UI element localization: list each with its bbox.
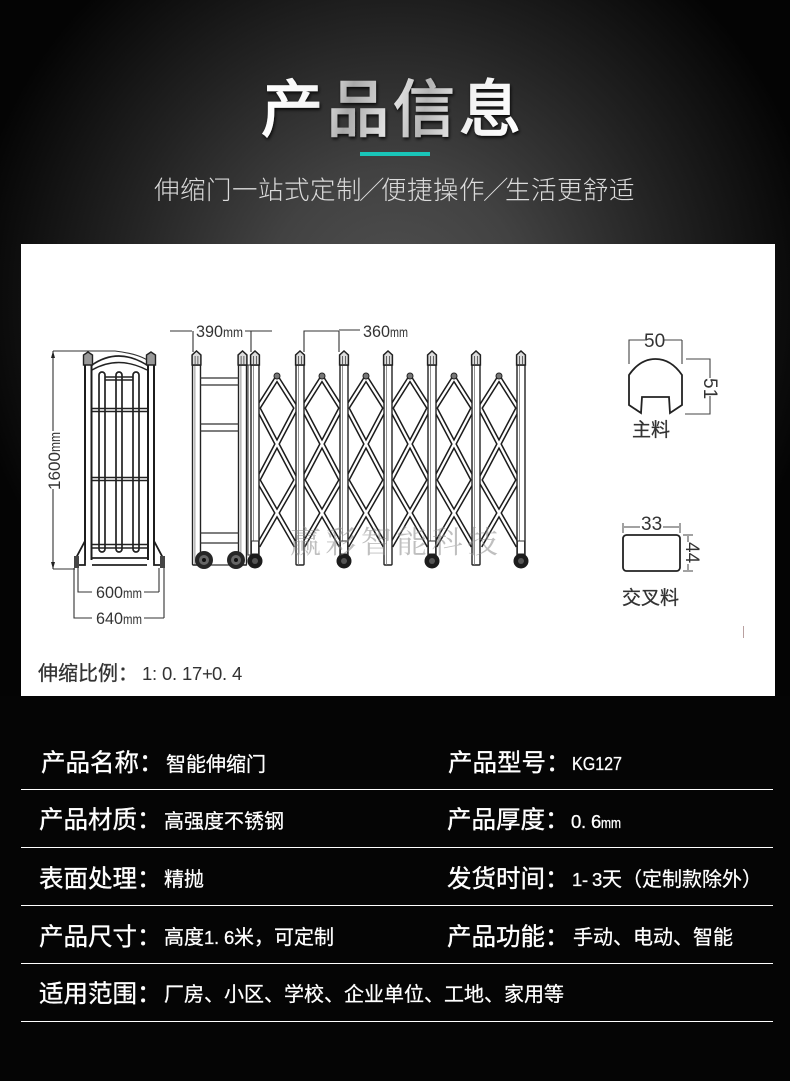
scale ratio note (38, 662, 242, 685)
dimension: 360mm (304, 322, 408, 352)
spec row: thickness: 产品厚度： (447, 806, 570, 834)
dimension: 390mm (170, 322, 272, 352)
spec row: surface treatment: 精抛 (164, 868, 204, 891)
dimension: 360mm: mm (390, 324, 408, 340)
profile: main material cross-section: 50 (644, 331, 665, 352)
spec row: material: 产品材质： (39, 806, 162, 834)
spec row: thickness (447, 806, 621, 834)
spec row: product model (448, 749, 622, 777)
dimension: width 600mm: 600 (96, 583, 123, 602)
scale ratio note: 伸缩比例： (38, 662, 138, 685)
drawing: scissor lattice gate (248, 351, 528, 568)
spec row: material: 高强度不锈钢 (164, 810, 284, 833)
dimension: width 640mm: 640 (96, 609, 123, 628)
profile: main material cross-section (629, 331, 720, 441)
spec row: delivery time: 1-3 (572, 869, 602, 890)
spec row: thickness: mm (601, 815, 621, 832)
spec row: delivery time (447, 865, 762, 893)
dimension: width 640mm (74, 568, 164, 628)
spec row: size: 产品尺寸： (39, 923, 162, 951)
spec row: scope of application: 适用范围： (39, 980, 162, 1008)
spec row: scope of application (39, 980, 564, 1008)
dimension: width 600mm: mm (123, 585, 142, 601)
spec row: thickness: 0.6 (571, 811, 601, 832)
spec row: product name: 产品名称： (41, 749, 164, 777)
dimension: 390mm: 390 (196, 322, 223, 341)
spec row: function: 手动、电动、智能 (573, 926, 733, 949)
spec row: product model: 产品型号： (448, 749, 570, 777)
profile: main material cross-section: 51 (699, 378, 720, 399)
spec row: size: 1.6 (204, 927, 234, 948)
dimension: height 1600mm (45, 351, 75, 569)
spec row: material (39, 806, 284, 834)
spec row: delivery time: 发货时间： (447, 865, 570, 893)
spec row: function: 产品功能： (447, 923, 570, 951)
header background glow (0, 0, 790, 696)
spec row: surface treatment: 表面处理： (39, 865, 162, 893)
spec row: product name: 智能伸缩门 (166, 753, 266, 776)
dimension: height 1600mm: 1600 (45, 452, 64, 490)
spec row: size: 高度 (164, 926, 204, 949)
profile: cross material section: 44 (681, 542, 702, 564)
dimension: 360mm: 360 (363, 322, 390, 341)
dimension: 390mm: mm (223, 324, 243, 340)
profile: cross material section (622, 514, 702, 609)
profile: main material cross-section: 主料 (632, 419, 670, 441)
title: 产品信息 (261, 76, 521, 145)
dimension: height 1600mm: mm (47, 432, 64, 452)
spec row: scope of application: 厂房、小区、学校、企业单位、工地、家用等 (164, 983, 564, 1006)
drawing: front view of gate head (53, 351, 165, 568)
scale ratio note: 1:0.17+0.4 (142, 663, 242, 684)
spec row: product model: KG127 (572, 753, 622, 774)
dimension: width 600mm (78, 568, 159, 602)
small tick mark (743, 626, 744, 638)
spec row: product name (41, 749, 266, 777)
spec row: function (447, 923, 733, 951)
panel: technical drawing (21, 244, 775, 696)
dimension: width 640mm: mm (123, 611, 142, 627)
spec row: size: 米，可定制 (234, 926, 334, 949)
drawing: side frame with wheels (192, 351, 252, 569)
spec row: size (39, 923, 334, 951)
teal accent bar (360, 152, 430, 156)
watermark: 赢彩智能科技 (290, 525, 498, 560)
subtitle: 伸缩门一站式定制／便捷操作／生活更舒适 (154, 177, 635, 205)
spec row: delivery time: 天（定制款除外） (602, 868, 762, 891)
profile: cross material section: 33 (641, 514, 662, 535)
profile: cross material section: 交叉料 (622, 587, 679, 609)
